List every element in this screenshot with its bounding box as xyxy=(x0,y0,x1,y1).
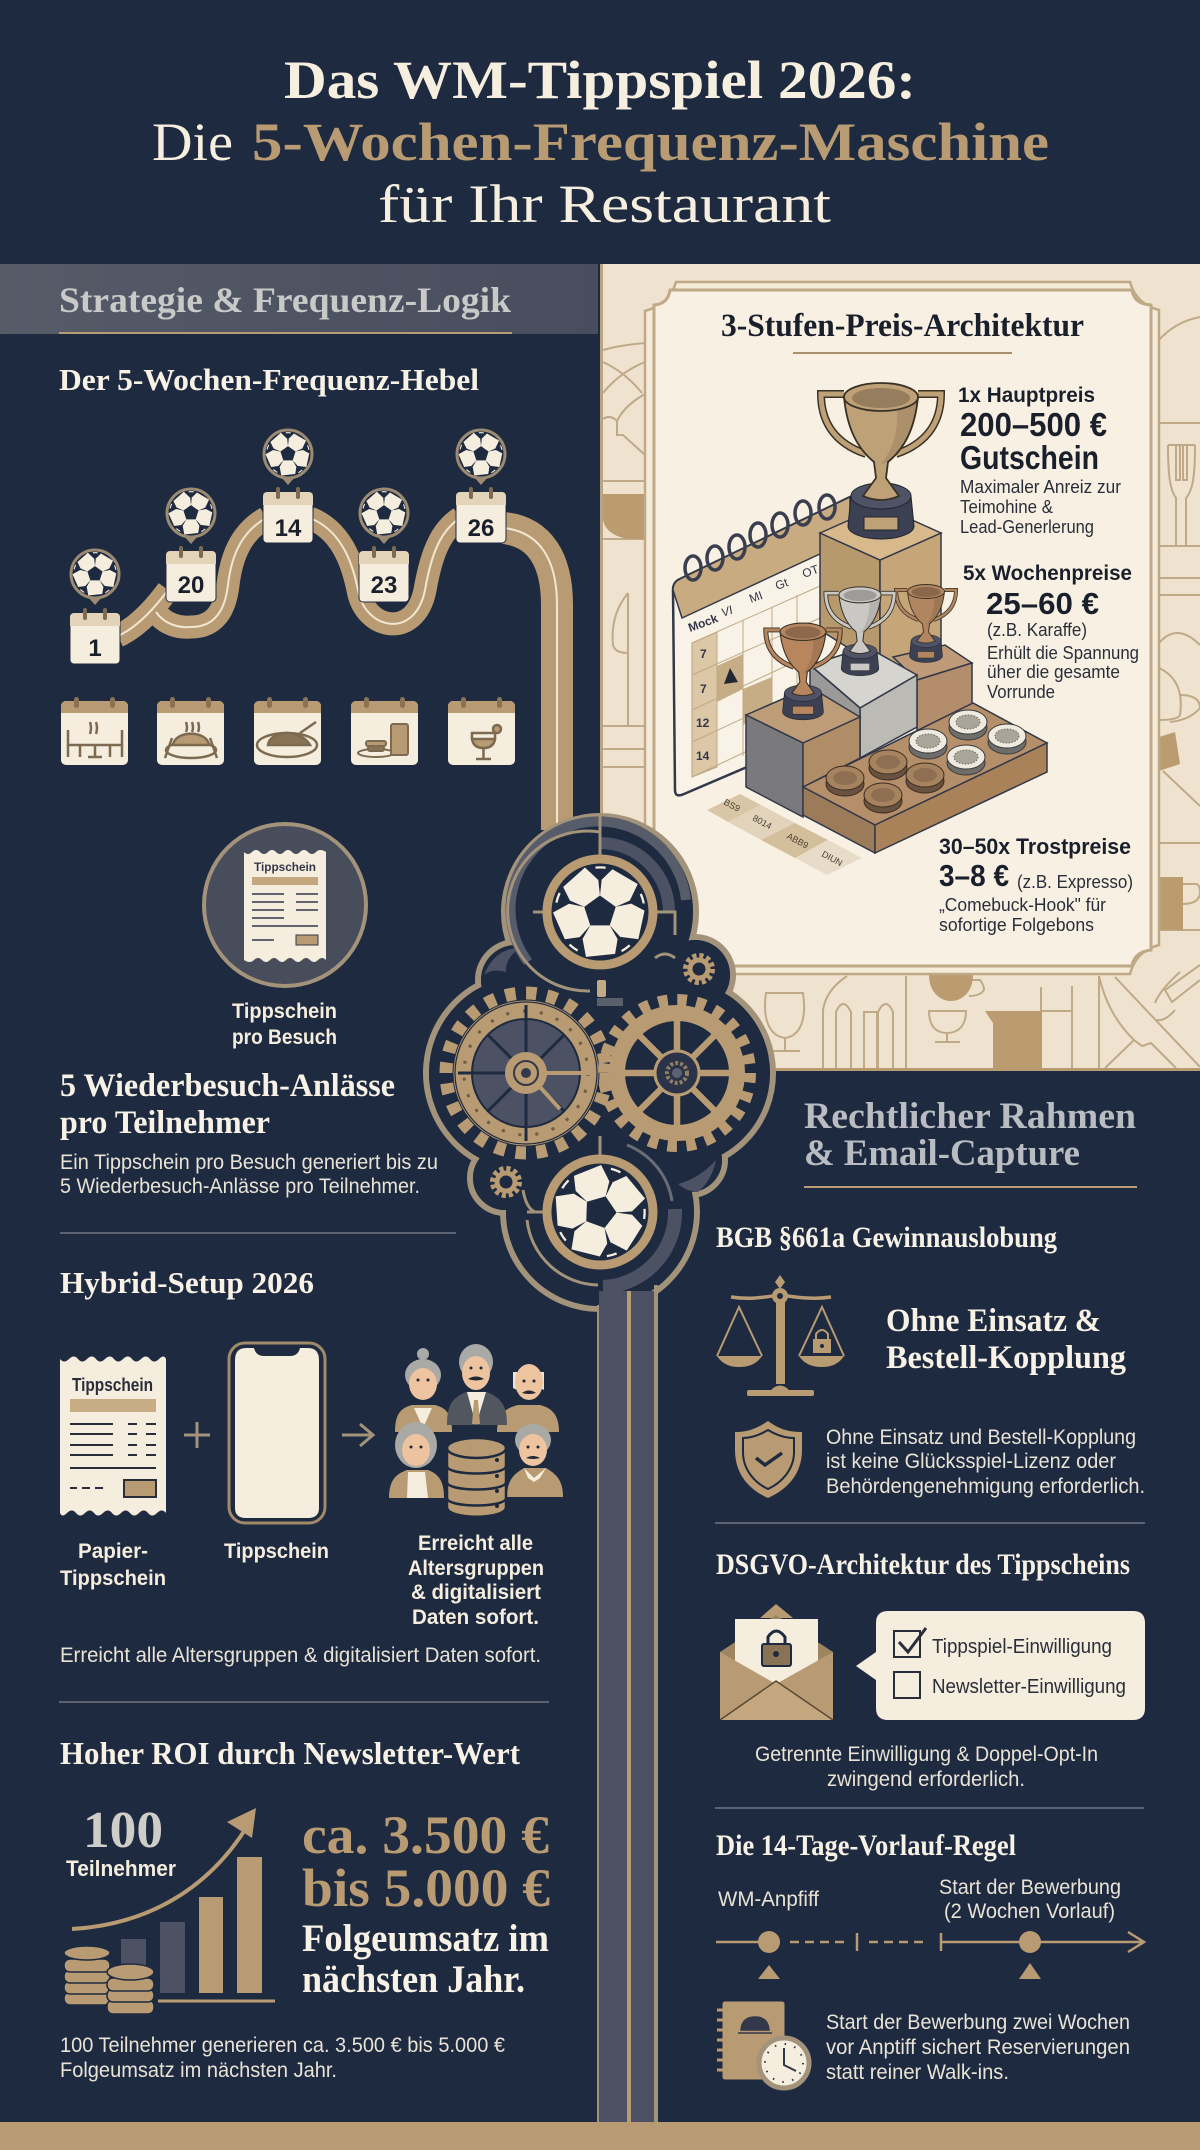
key figure: Folgeumsatz: nächsten Jahr. xyxy=(302,1958,525,2001)
title xyxy=(152,50,1049,234)
text: Wiederbesuch description: Ein Tippschein pro Besuch generiert bis zu xyxy=(60,1151,438,1174)
illustration: calendar: VI xyxy=(719,603,735,620)
heading: 5 Wiederbesuch-Anlässe: 5 Wiederbesuch-Anlässe xyxy=(60,1068,395,1104)
text: hybrid description: Erreicht alle Altersgruppen & digitalisiert Daten sofort. xyxy=(60,1644,541,1667)
text: Wiederbesuch description xyxy=(60,1151,438,1198)
chart: growth bars: Teilnehmer xyxy=(66,1856,176,1881)
match calendars with pins: 23 xyxy=(371,572,397,599)
text: Hauptpreis xyxy=(958,384,1121,537)
text: Wochenpreise: üher die gesamte xyxy=(987,662,1120,682)
illustration: calendar: Mock xyxy=(686,611,720,635)
label: Tippschein pro Besuch: pro Besuch xyxy=(232,1026,337,1049)
text: ROI description xyxy=(60,2034,505,2082)
text: Vorlauf description xyxy=(826,2011,1130,2084)
heading: Rechtlicher Rahmen xyxy=(804,1096,1137,1187)
icon: Tippschein per visit: Tippschein xyxy=(254,860,316,874)
text: opt-in xyxy=(755,1743,1098,1791)
icon row: restaurant calendars xyxy=(61,697,515,765)
text: Wiederbesuch description: 5 Wiederbesuch-Anlässe pro Teilnehmer. xyxy=(60,1175,420,1198)
icon: notebook with clock xyxy=(717,2001,809,2088)
callout: Ohne Einsatz: Ohne Einsatz & xyxy=(886,1303,1101,1339)
key figure: Folgeumsatz: Folgeumsatz im xyxy=(302,1917,549,1960)
title: 5-Wochen-Frequenz-Maschine xyxy=(252,112,1049,172)
heading: 14-Tage-Vorlauf: Die 14-Tage-Vorlauf-Regel xyxy=(716,1829,1016,1862)
illustration: calendar: MI xyxy=(747,588,765,606)
text: Wochenpreise xyxy=(963,562,1139,702)
heading: DSGVO: DSGVO-Architektur des Tippscheins xyxy=(716,1548,1130,1581)
text: Wochenpreise: (z.B. Karaffe) xyxy=(987,620,1087,640)
labels: hybrid setup: Tippschein xyxy=(60,1567,166,1590)
text: license: Ohne Einsatz und Bestell-Kopplung xyxy=(826,1426,1136,1449)
text: Hauptpreis: Lead-Generlerung xyxy=(960,517,1094,537)
chart: growth bars: 100 xyxy=(83,1802,163,1859)
label: Tippschein pro Besuch: Tippschein xyxy=(232,1000,337,1023)
text: license: Behördengenehmigung erforderlich. xyxy=(826,1475,1145,1498)
icon: people and database xyxy=(389,1344,563,1517)
text: Hauptpreis: Maximaler Anreiz zur xyxy=(960,477,1121,497)
timeline xyxy=(716,1876,1144,1979)
footer bar xyxy=(0,2122,1200,2150)
key figure: Folgeumsatz xyxy=(302,1805,550,2001)
text: Trostpreise: sofortige Folgebons xyxy=(939,915,1094,935)
panel: prize card xyxy=(645,282,1159,974)
central gear mechanism xyxy=(426,816,773,1309)
labels: hybrid setup: Erreicht alle xyxy=(418,1532,533,1555)
text: Trostpreise: (z.B. Expresso) xyxy=(1017,872,1133,892)
heading: Hoher ROI: Hoher ROI durch Newsletter-Wert xyxy=(60,1735,520,1771)
text: Wochenpreise: Vorrunde xyxy=(987,682,1055,702)
text: Trostpreise: „Comebuck-Hook" für xyxy=(939,895,1106,915)
winding road xyxy=(118,518,557,830)
match calendars with pins: 20 xyxy=(178,572,204,599)
text: Trostpreise: 3–8 € xyxy=(939,858,1009,893)
icon: smartphone xyxy=(229,1343,325,1523)
title: Die xyxy=(152,112,233,172)
heading: 5 Wiederbesuch-Anlässe xyxy=(60,1068,395,1141)
section band: Strategie: Strategie & Frequenz-Logik xyxy=(59,280,511,320)
right gear xyxy=(604,1000,750,1146)
labels: hybrid setup: Papier- xyxy=(78,1540,148,1563)
heading: 3-Stufen-Preis-Architektur: 3-Stufen-Preis-Architektur xyxy=(721,308,1084,344)
section band: Strategie xyxy=(0,264,598,334)
consent box xyxy=(856,1611,1145,1720)
icon: envelope with lock xyxy=(720,1604,833,1720)
text: license: ist keine Glücksspiel-Lizenz oder xyxy=(826,1450,1116,1473)
text: ROI description: Folgeumsatz im nächsten Jahr. xyxy=(60,2059,337,2082)
top football xyxy=(508,816,686,1006)
text: Vorlauf description: statt reiner Walk-ins. xyxy=(826,2061,1009,2084)
timeline: WM-Anpfiff xyxy=(718,1888,819,1911)
icon: paper ticket: Tippschein xyxy=(72,1375,153,1395)
illustration: vouchers xyxy=(707,794,862,875)
match calendars with pins xyxy=(67,426,509,664)
consent box: Newsletter-Einwilligung xyxy=(932,1676,1126,1698)
heading: Hybrid-Setup 2026: Hybrid-Setup 2026 xyxy=(60,1265,314,1300)
illustration: vouchers: ABB9 xyxy=(785,831,810,851)
small gears xyxy=(493,956,712,1195)
icon: paper ticket xyxy=(60,1356,166,1516)
text: Hauptpreis: 200–500 € xyxy=(960,406,1107,443)
illustration: calendar: 7 xyxy=(700,647,707,661)
text: Trostpreise: 30–50x Trostpreise xyxy=(939,834,1131,859)
illustration: vouchers: DIUN xyxy=(820,849,844,868)
illustration: prize podium xyxy=(746,383,1047,853)
labels: hybrid setup xyxy=(60,1532,544,1629)
icon: scales xyxy=(717,1275,844,1396)
illustration: calendar: 14 xyxy=(696,749,710,763)
left gear xyxy=(446,993,606,1153)
labels: hybrid setup: Tippschein xyxy=(224,1540,329,1563)
text: Wochenpreise: 5x Wochenpreise xyxy=(963,562,1132,585)
timeline: Start der Bewerbung xyxy=(939,1876,1121,1899)
center column xyxy=(597,1285,658,2122)
timeline: (2 Wochen Vorlauf) xyxy=(944,1900,1115,1923)
illustration: vouchers: 8014 xyxy=(751,813,773,831)
text: Wochenpreise: 25–60 € xyxy=(986,586,1099,621)
chart: growth bars xyxy=(64,1802,275,2014)
illustration: calendar: Gt xyxy=(773,575,791,593)
text: Wochenpreise: Erhült die Spannung xyxy=(987,643,1139,663)
text: ROI description: 100 Teilnehmer generieren ca. 3.500 € bis 5.000 € xyxy=(60,2034,505,2057)
illustration: calendar xyxy=(673,495,850,795)
heading: BGB: BGB §661a Gewinnauslobung xyxy=(716,1221,1057,1254)
text: Vorlauf description: Start der Bewerbung zwei Wochen xyxy=(826,2011,1130,2034)
labels: hybrid setup: & digitalisiert xyxy=(411,1581,541,1604)
text: Hauptpreis: Teimohine & xyxy=(960,497,1053,517)
illustration: calendar: 7 xyxy=(700,682,707,696)
icon: arrow xyxy=(342,1424,373,1446)
heading: Rechtlicher Rahmen: & Email-Capture xyxy=(804,1133,1080,1174)
illustration: vouchers: BS9 xyxy=(722,797,742,814)
text: opt-in: zwingend erforderlich. xyxy=(827,1768,1025,1791)
match calendars with pins: 14 xyxy=(275,515,302,542)
heading: Der 5-Wochen-Frequenz-Hebel: Der 5-Wochen-Frequenz-Hebel xyxy=(59,362,479,397)
text: license xyxy=(826,1426,1145,1498)
label: Tippschein pro Besuch xyxy=(232,1000,337,1049)
title: für Ihr Restaurant xyxy=(378,174,831,234)
gray lobe crescents xyxy=(484,948,716,1192)
text: Hauptpreis: Gutschein xyxy=(960,439,1099,476)
illustration: calendar: 12 xyxy=(696,716,710,730)
icon: shield xyxy=(735,1421,802,1498)
illustration: calendar: OT xyxy=(800,562,821,581)
panel: beige prize background xyxy=(600,264,1200,1071)
callout: Ohne Einsatz xyxy=(886,1303,1126,1376)
match calendars with pins: 1 xyxy=(88,635,102,662)
consent box: Tippspiel-Einwilligung xyxy=(932,1636,1112,1658)
icon: Tippschein per visit xyxy=(204,824,366,986)
title: Das WM-Tippspiel 2026: xyxy=(284,50,916,110)
bottom football xyxy=(523,1136,676,1288)
callout: Ohne Einsatz: Bestell-Kopplung xyxy=(886,1340,1126,1376)
labels: hybrid setup: Altersgruppen xyxy=(408,1557,544,1580)
text: opt-in: Getrennte Einwilligung & Doppel-Opt-In xyxy=(755,1743,1098,1766)
labels: hybrid setup: Daten sofort. xyxy=(412,1606,539,1629)
icon: plus xyxy=(184,1422,210,1448)
key figure: Folgeumsatz: bis 5.000 € xyxy=(302,1858,550,1918)
heading: 5 Wiederbesuch-Anlässe: pro Teilnehmer xyxy=(60,1105,270,1141)
match calendars with pins: 26 xyxy=(468,515,494,542)
text: Vorlauf description: vor Anptiff sichert Reservierungen xyxy=(826,2036,1130,2059)
key figure: Folgeumsatz: ca. 3.500 € xyxy=(302,1805,549,1865)
text: Hauptpreis: 1x Hauptpreis xyxy=(958,384,1095,407)
heading: Rechtlicher Rahmen: Rechtlicher Rahmen xyxy=(804,1096,1136,1137)
text: Trostpreise xyxy=(939,834,1133,935)
